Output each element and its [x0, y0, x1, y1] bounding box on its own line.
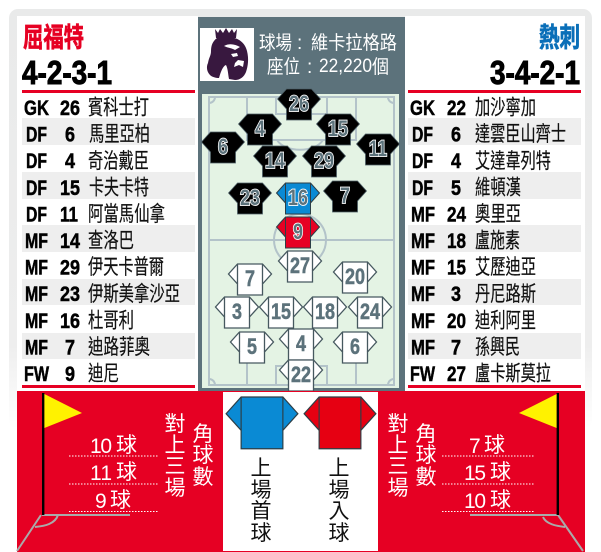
home list: MF — [25, 283, 48, 306]
left corner stats: 球 — [116, 434, 137, 457]
away shirt 20 — [334, 262, 376, 293]
home list: DF — [26, 203, 47, 226]
away shirt 22: 22 — [291, 362, 311, 387]
right corner stats: 球 — [484, 434, 505, 457]
home list: 伊斯美拿沙亞 — [88, 282, 180, 306]
panel: home team — [17, 16, 198, 391]
left vertical label: corners — [192, 423, 214, 489]
away list: 4 — [451, 150, 461, 173]
away list: 20 — [447, 310, 466, 333]
away list: FW — [410, 363, 435, 386]
left vertical label: corners: 球 — [192, 444, 214, 467]
right corner stats: 球 — [490, 489, 511, 512]
right corner stats: 10 — [464, 490, 486, 513]
left vertical label: last three matches: 場 — [164, 477, 186, 500]
away list: 3 — [451, 283, 461, 306]
home list: MF — [25, 257, 48, 280]
venue text: : — [297, 33, 302, 54]
left vertical label: last three matches: 上 — [164, 434, 186, 457]
home shirt 15 — [316, 114, 360, 145]
left corner stats: 10 — [90, 435, 112, 458]
away list: 盧卡斯莫拉 — [475, 363, 551, 386]
right vertical label: last three matches: 對 — [388, 413, 408, 436]
away list: 6 — [451, 124, 461, 147]
away shirt 22 — [280, 360, 322, 391]
home list: 7 — [65, 336, 75, 359]
home shirt 11 — [356, 134, 400, 165]
pitch — [202, 94, 399, 388]
icon: red shirt — [304, 397, 376, 449]
away shirt 5: 5 — [247, 334, 257, 359]
right vertical label: corners: 角 — [416, 423, 436, 446]
home shirt 29 — [302, 146, 346, 177]
away shirt 6 — [334, 332, 376, 363]
away list: MF — [411, 336, 435, 359]
right vertical label: corners — [416, 423, 436, 489]
home list: MF — [25, 336, 48, 359]
away shirt 6: 6 — [350, 334, 360, 359]
home list: 迪路菲奧 — [88, 336, 150, 359]
home list: DF — [26, 177, 47, 200]
left vertical label: corners: 數 — [192, 466, 214, 489]
home list: 29 — [60, 257, 80, 280]
away list: 5 — [451, 177, 461, 200]
home team name: 屈福特 — [23, 23, 84, 53]
right corner stats — [442, 434, 534, 513]
icon: right corner flag — [470, 393, 583, 551]
left vertical label: last three matches — [164, 413, 186, 500]
label: first goal: 首 — [250, 500, 272, 523]
home list: 15 — [60, 177, 80, 200]
away list: MF — [411, 257, 435, 280]
right vertical label: corners: 數 — [416, 466, 436, 489]
away list — [408, 90, 581, 388]
frame — [9, 9, 592, 429]
icon: blue shirt — [226, 397, 298, 449]
away list: 24 — [447, 203, 466, 226]
away shirt 3: 3 — [232, 299, 242, 324]
home shirt 14 — [254, 146, 296, 177]
home list: 賓科士打 — [88, 97, 149, 120]
right vertical label: last three matches — [388, 413, 408, 500]
away shirt 18 — [304, 297, 346, 328]
home list: 杜哥利 — [88, 309, 134, 332]
right vertical label: last three matches: 上 — [388, 434, 408, 457]
icon: league lion logo — [200, 28, 254, 81]
away list: MF — [411, 283, 435, 306]
away list: GK — [410, 97, 435, 120]
home list: FW — [24, 363, 49, 386]
panel: venue and pitch — [198, 17, 405, 391]
home list: DF — [26, 124, 47, 147]
home shirt 23 — [228, 183, 272, 214]
home shirt 11: 11 — [369, 136, 387, 161]
away list: MF — [411, 310, 435, 333]
label: first goal: 上 — [250, 457, 272, 480]
panel: bottom stats — [17, 391, 585, 552]
away shirt 3 — [216, 297, 258, 328]
venue text: 個 — [372, 56, 389, 78]
away list: 15 — [447, 257, 466, 280]
away list: 艾達韋列特 — [475, 150, 551, 173]
away list: MF — [411, 203, 435, 226]
home list: 14 — [60, 230, 80, 253]
away shirt 24 — [348, 297, 392, 328]
label: first goal — [250, 457, 272, 545]
label: scored: 場 — [328, 479, 350, 502]
home shirt 16 first scorer: 16 — [288, 185, 308, 210]
label: first goal: 場 — [250, 479, 272, 502]
home shirt 6 — [202, 132, 244, 163]
home list: 查洛巴 — [88, 230, 134, 253]
home shirt 7 — [324, 181, 366, 212]
away shirt 7 — [228, 264, 272, 295]
home list: 迪尼 — [88, 363, 119, 386]
home list: 卡夫卡特 — [89, 176, 149, 199]
label: first goal: 球 — [250, 522, 272, 545]
away list: 迪利阿里 — [475, 309, 536, 332]
away shirt 18: 18 — [315, 299, 335, 324]
home shirt 15: 15 — [328, 116, 348, 141]
away list: 22 — [447, 97, 466, 120]
left corner stats: 11 — [90, 462, 112, 485]
away team name: 熱刺 — [539, 23, 580, 53]
panel: away team — [405, 16, 585, 391]
home list: 阿當馬仙拿 — [88, 202, 165, 226]
away list: DF — [412, 177, 433, 200]
away shirt 20: 20 — [345, 264, 365, 289]
home list: 6 — [65, 124, 75, 147]
home list: DF — [26, 150, 47, 173]
home list — [22, 90, 195, 388]
home list: MF — [25, 230, 48, 253]
away list: 7 — [451, 336, 461, 359]
home list: 馬里亞柏 — [89, 123, 150, 146]
right vertical label: last three matches: 三 — [388, 455, 408, 478]
away list: 加沙寧加 — [475, 97, 536, 120]
left corner stats: 球 — [116, 461, 137, 484]
away list: 奧里亞 — [475, 203, 521, 226]
home shirt 26 — [278, 89, 320, 120]
panel: shirt legend — [223, 392, 378, 551]
home list: 4 — [65, 150, 75, 173]
left corner stats: 球 — [110, 489, 131, 512]
home shirt 16 first scorer — [276, 183, 320, 214]
away list: MF — [411, 230, 435, 253]
venue text: 座位 — [267, 56, 300, 78]
right corner stats: 球 — [490, 461, 511, 484]
away list: DF — [412, 124, 433, 147]
home list: 伊天卡普爾 — [88, 256, 164, 279]
away list: 18 — [447, 230, 466, 253]
away shirt 15 — [260, 297, 302, 328]
venue text: 22,220 — [319, 56, 372, 77]
home list: 26 — [60, 97, 80, 120]
left corner stats: 9 — [95, 490, 107, 513]
away shirt 4 — [280, 329, 322, 360]
away formation: 3-4-2-1 — [490, 54, 580, 91]
left vertical label: corners: 角 — [192, 423, 214, 446]
away shirt 27 — [278, 251, 322, 282]
home shirt 9 scorer — [276, 217, 320, 248]
left corner stats — [69, 434, 158, 513]
venue text — [259, 32, 397, 78]
label: scored: 上 — [328, 457, 350, 480]
away list: 維頓漢 — [475, 176, 521, 199]
home list: 11 — [60, 203, 78, 226]
home shirt 7: 7 — [340, 183, 350, 208]
home shirt 23: 23 — [240, 185, 260, 210]
home shirt 9 scorer: 9 — [293, 219, 303, 244]
away list: 27 — [447, 363, 466, 386]
away shirt 7: 7 — [245, 266, 255, 291]
away shirt 15: 15 — [271, 299, 291, 324]
away list: DF — [412, 150, 433, 173]
label: scored: 入 — [328, 500, 350, 523]
right vertical label: corners: 球 — [416, 444, 436, 467]
home formation: 4-2-3-1 — [22, 54, 112, 91]
venue text: : — [307, 57, 312, 78]
home shirt 6: 6 — [218, 134, 228, 159]
away shirt 4: 4 — [296, 331, 307, 356]
away list: 孫興民 — [475, 336, 520, 359]
right corner stats: 15 — [464, 462, 486, 485]
right corner stats: 7 — [469, 435, 481, 458]
away list: 達雲臣山齊士 — [475, 123, 566, 146]
away shirt 5 — [230, 332, 274, 363]
icon: left corner flag — [17, 393, 130, 551]
venue text: 維卡拉格路 — [311, 32, 397, 54]
home list: 9 — [65, 363, 75, 386]
left vertical label: last three matches: 對 — [164, 413, 186, 436]
home list: 23 — [60, 283, 80, 306]
home shirt 4: 4 — [255, 116, 266, 141]
home shirt 14: 14 — [265, 148, 286, 173]
home list: 奇治戴臣 — [88, 150, 149, 173]
label: scored: 球 — [328, 522, 350, 545]
home list: MF — [25, 310, 48, 333]
away list: 丹尼路斯 — [475, 283, 536, 306]
label: scored — [328, 457, 350, 545]
home list: 16 — [60, 310, 80, 333]
right vertical label: last three matches: 場 — [388, 477, 408, 500]
home shirt 29: 29 — [314, 148, 334, 173]
left vertical label: last three matches: 三 — [164, 455, 186, 478]
venue text: 球場 — [259, 32, 292, 54]
away shirt 24: 24 — [360, 299, 381, 324]
home shirt 26: 26 — [289, 91, 309, 116]
away shirt 27: 27 — [290, 253, 310, 278]
home shirt 4 — [238, 114, 282, 145]
away list: 盧施素 — [475, 230, 520, 253]
home list: GK — [24, 97, 49, 120]
away list: 艾歷迪亞 — [475, 256, 536, 279]
